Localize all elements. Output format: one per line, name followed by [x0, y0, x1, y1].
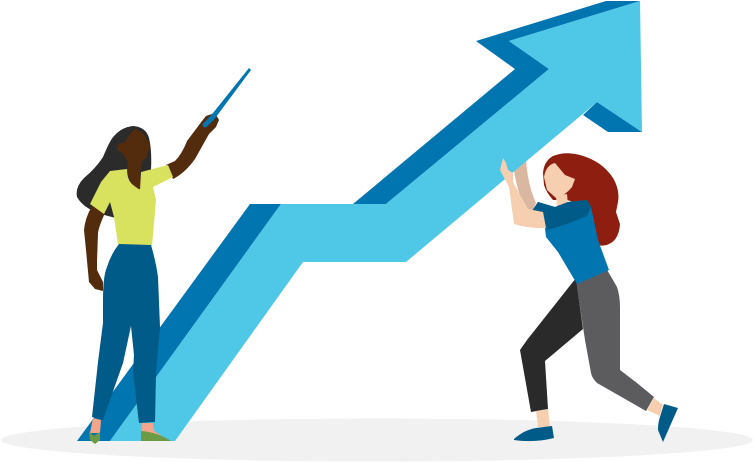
- left shoe: [514, 426, 554, 441]
- arrow dark side: [77, 1, 640, 441]
- sleeve shade: [532, 200, 591, 230]
- shirt: [532, 200, 609, 284]
- right ankle: [647, 398, 663, 416]
- pointer: [205, 68, 251, 125]
- face: [117, 129, 150, 163]
- shirt: [90, 165, 173, 246]
- hair: [543, 153, 620, 246]
- left ankle: [536, 409, 550, 427]
- growth arrow: [77, 1, 642, 441]
- grey leg: [576, 268, 654, 411]
- face: [544, 163, 575, 198]
- arrow lower barb: [583, 102, 642, 132]
- back arm of pushing woman: [513, 160, 536, 212]
- right shoe: [141, 431, 171, 441]
- raised arm: [166, 113, 219, 179]
- woman pushing: [500, 153, 678, 442]
- arrow light face: [110, 1, 642, 441]
- left shoe: [89, 431, 100, 444]
- front arm: [500, 158, 546, 228]
- woman pointing: [77, 68, 251, 444]
- left ankle: [90, 418, 101, 433]
- hair: [77, 126, 151, 219]
- neck: [127, 156, 143, 190]
- right ankle: [141, 423, 161, 437]
- right shoe: [658, 404, 678, 442]
- neck: [556, 194, 568, 208]
- trousers: [92, 244, 160, 423]
- dark leg: [520, 278, 583, 412]
- ground shadow: [1, 418, 753, 462]
- lowered arm: [84, 206, 105, 291]
